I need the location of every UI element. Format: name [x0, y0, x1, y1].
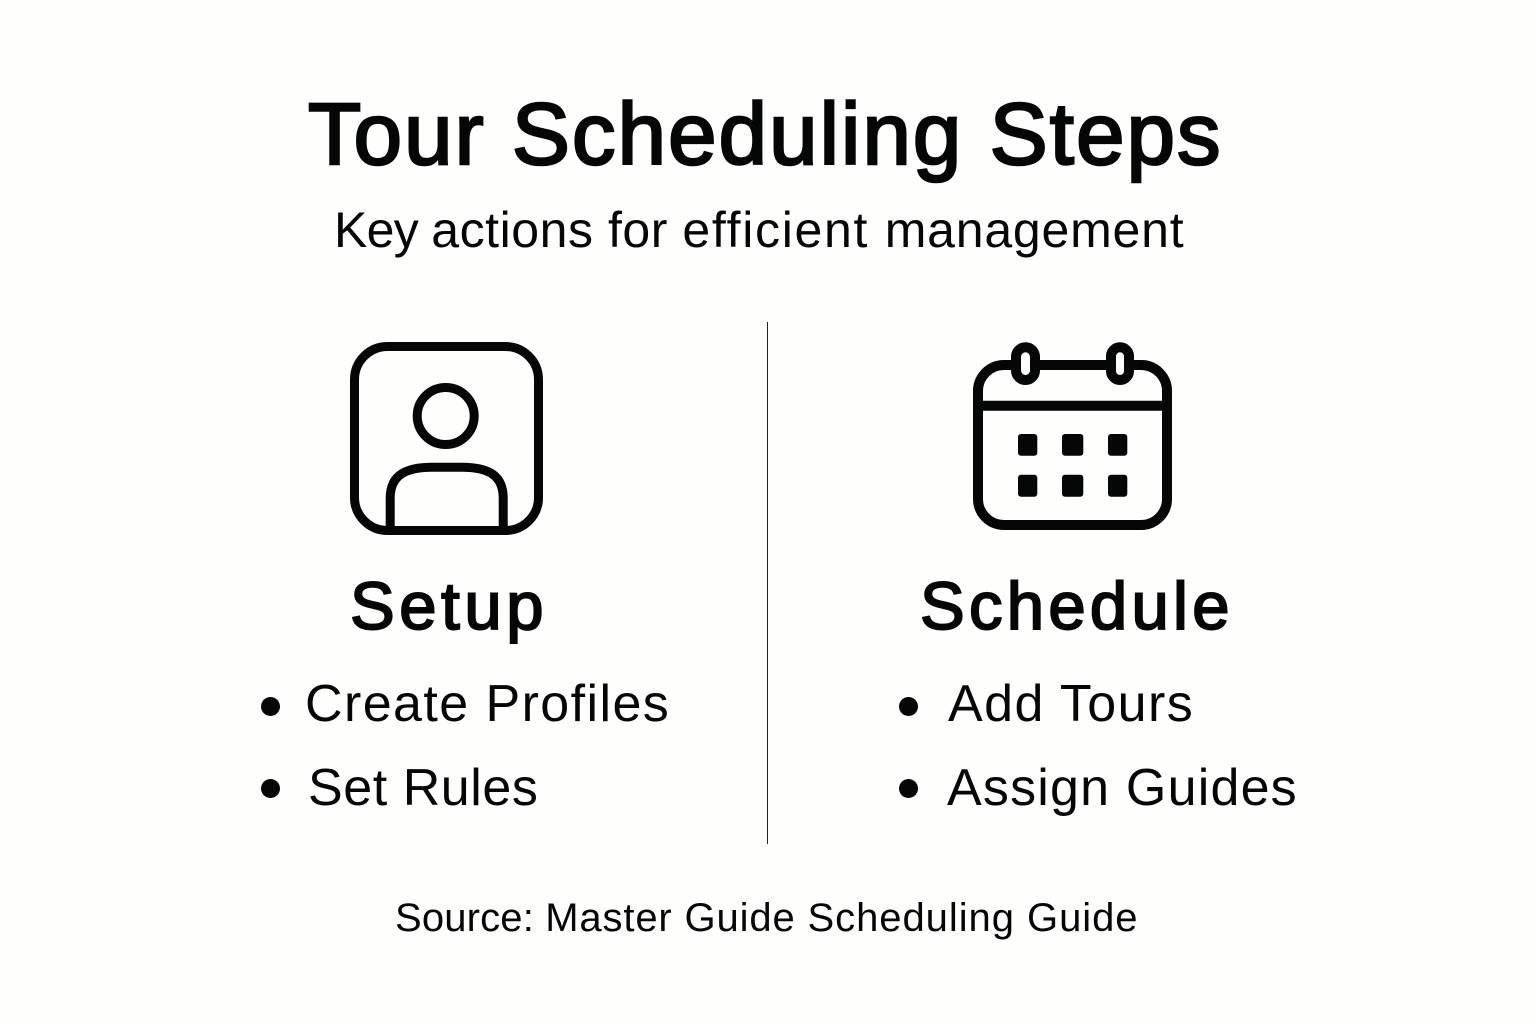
source note: Source: Master Guide Scheduling Guide	[395, 896, 1138, 940]
panel: schedule	[899, 342, 1298, 817]
item: create profiles: Create Profiles	[305, 675, 670, 733]
bullet list: setup	[261, 675, 670, 817]
bullet	[261, 779, 280, 798]
title: Tour Scheduling Steps	[308, 86, 1223, 183]
center divider	[767, 322, 768, 844]
heading: setup: Setup	[350, 569, 548, 644]
bullet list: schedule	[899, 675, 1298, 817]
icon: user profile	[350, 342, 543, 535]
bullet	[899, 779, 918, 798]
bullet	[899, 697, 918, 716]
heading: schedule: Schedule	[920, 569, 1234, 644]
panel: setup	[261, 342, 670, 817]
item: set rules: Set Rules	[308, 759, 538, 817]
subtitle: Key actions for efficient management	[334, 202, 1184, 258]
bullet	[261, 697, 280, 716]
item: add tours: Add Tours	[948, 675, 1194, 733]
item: assign guides: Assign Guides	[947, 759, 1298, 817]
icon: calendar	[973, 342, 1172, 530]
